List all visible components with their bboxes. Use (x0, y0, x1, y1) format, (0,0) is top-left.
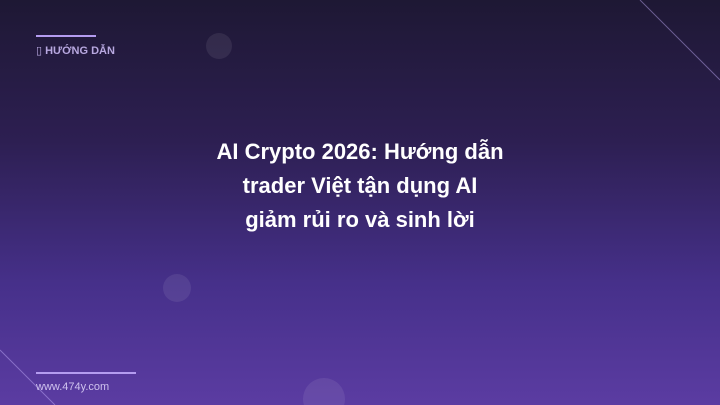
footer website: www.474y.com (36, 381, 109, 393)
category label: ▯ HƯỚNG DẪN (36, 45, 115, 57)
decorative circle (163, 274, 191, 302)
decorative circle (206, 33, 232, 59)
decorative circle (303, 378, 345, 405)
title: AI Crypto 2026: Hướng dẫn (216, 139, 504, 164)
title (216, 139, 504, 232)
title: giảm rủi ro và sinh lời (245, 207, 475, 232)
title: trader Việt tận dụng AI (243, 173, 477, 198)
